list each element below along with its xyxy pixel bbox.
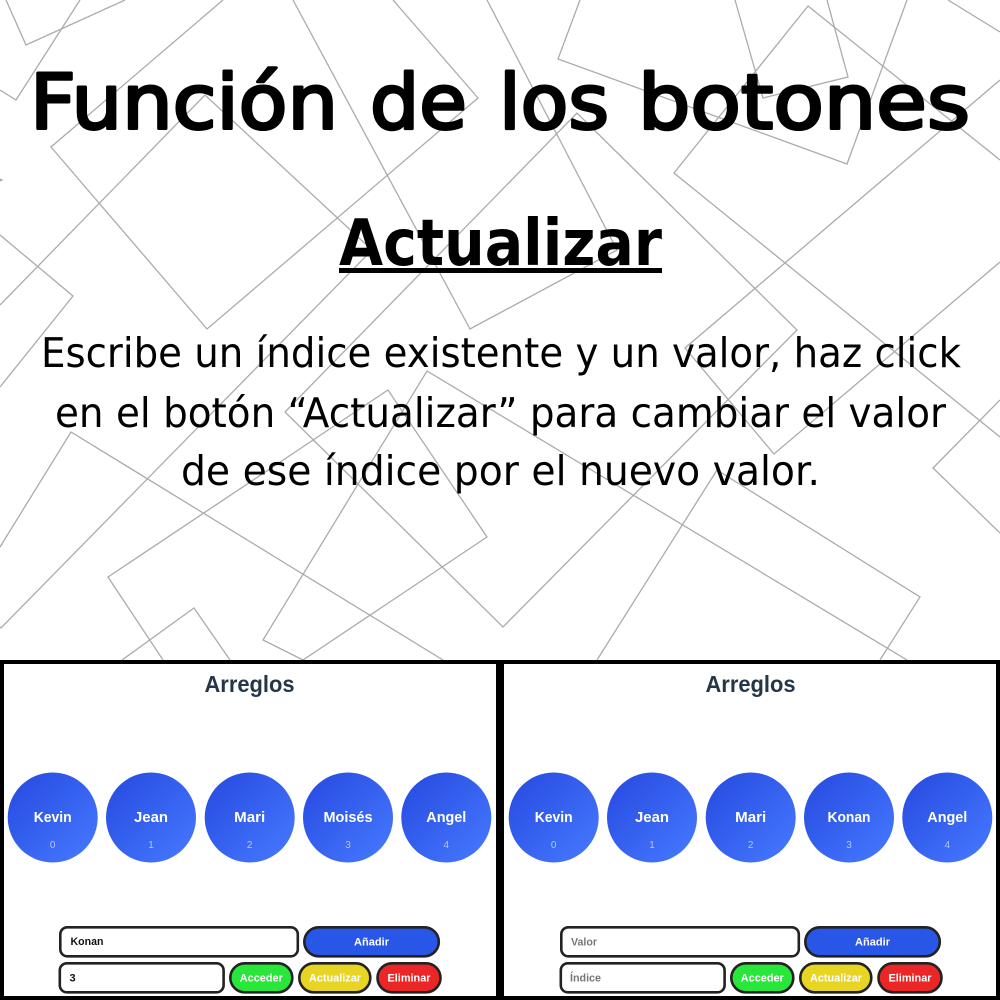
button: Acceder bbox=[731, 963, 793, 992]
description text bbox=[41, 329, 961, 495]
button: Actualizar: Actualizar bbox=[309, 972, 362, 984]
input: value Konan: Konan bbox=[70, 936, 104, 948]
array node: Angel: Angel bbox=[426, 809, 466, 826]
button: Añadir bbox=[805, 927, 940, 956]
input: index 3: 3 bbox=[70, 972, 76, 984]
button: Eliminar: Eliminar bbox=[888, 972, 932, 984]
button: Añadir: Añadir bbox=[354, 936, 390, 948]
array node: Konan: Konan bbox=[828, 809, 870, 826]
array node: Konan bbox=[804, 772, 894, 862]
array node: Mari: Mari bbox=[234, 809, 265, 826]
description text: en el botón “Actualizar” para cambiar el valor bbox=[55, 389, 946, 437]
array node: Jean bbox=[106, 772, 196, 862]
input: Índice placeholder: Índice bbox=[570, 972, 601, 984]
heading: Arreglos: Arreglos bbox=[204, 671, 294, 697]
array node: Jean: Jean bbox=[134, 809, 168, 826]
button: Acceder bbox=[230, 963, 292, 992]
button: Eliminar: Eliminar bbox=[388, 972, 431, 984]
button: Eliminar bbox=[378, 963, 440, 992]
input: Valor placeholder: Valor bbox=[571, 936, 598, 948]
panel: screenshot before update bbox=[2, 662, 498, 998]
array node: Mari: Mari bbox=[735, 809, 766, 826]
array node: Kevin: Kevin bbox=[34, 809, 72, 826]
button: Actualizar bbox=[800, 963, 871, 992]
array node: Angel: 4 bbox=[444, 840, 450, 851]
description text: Escribe un índice existente y un valor, haz click bbox=[41, 329, 961, 377]
array node: Moisés: Moisés bbox=[324, 809, 372, 826]
array node: Mari: 2 bbox=[247, 840, 253, 851]
button: Actualizar: Actualizar bbox=[810, 972, 863, 984]
button: Acceder: Acceder bbox=[741, 972, 785, 984]
array node: Mari bbox=[205, 772, 295, 862]
input: Valor placeholder bbox=[561, 927, 799, 956]
description text: de ese índice por el nuevo valor. bbox=[181, 447, 820, 495]
input: value Konan bbox=[60, 927, 298, 956]
array node: Jean: Jean bbox=[635, 809, 669, 826]
title: botones bbox=[638, 58, 970, 146]
input: index 3 bbox=[60, 963, 224, 992]
array node: Kevin bbox=[8, 772, 98, 862]
array node: Mari: 2 bbox=[748, 840, 754, 851]
button: Acceder: Acceder bbox=[240, 972, 284, 984]
button: Eliminar bbox=[878, 963, 942, 992]
heading: Arreglos: Arreglos bbox=[706, 671, 796, 697]
button: Actualizar bbox=[299, 963, 370, 992]
array node: Angel bbox=[902, 772, 992, 862]
title: Función bbox=[30, 58, 338, 146]
array node: Konan: 3 bbox=[846, 840, 852, 851]
panel: screenshot after update bbox=[502, 662, 998, 998]
array node: Kevin: 0 bbox=[551, 840, 557, 851]
input: Índice placeholder bbox=[561, 963, 725, 992]
title: de bbox=[370, 58, 467, 146]
array node: Moisés: 3 bbox=[345, 840, 351, 851]
button: Añadir bbox=[304, 927, 439, 956]
title: los bbox=[499, 58, 609, 146]
array node: Angel: 4 bbox=[945, 840, 951, 851]
subtitle: Actualizar bbox=[339, 207, 662, 281]
array node: Jean: 1 bbox=[649, 840, 655, 851]
array node: Jean bbox=[607, 772, 697, 862]
array node: Kevin bbox=[509, 772, 599, 862]
array node: Jean: 1 bbox=[148, 840, 154, 851]
array node: Kevin: Kevin bbox=[535, 809, 573, 826]
array node: Moisés bbox=[303, 772, 393, 862]
background pattern: outlined rotated squares bbox=[0, 0, 1000, 660]
array node: Mari bbox=[706, 772, 796, 862]
array node: Kevin: 0 bbox=[50, 840, 56, 851]
array node: Angel: Angel bbox=[927, 809, 967, 826]
button: Añadir: Añadir bbox=[855, 936, 891, 948]
array node: Angel bbox=[401, 772, 491, 862]
title bbox=[30, 58, 970, 146]
